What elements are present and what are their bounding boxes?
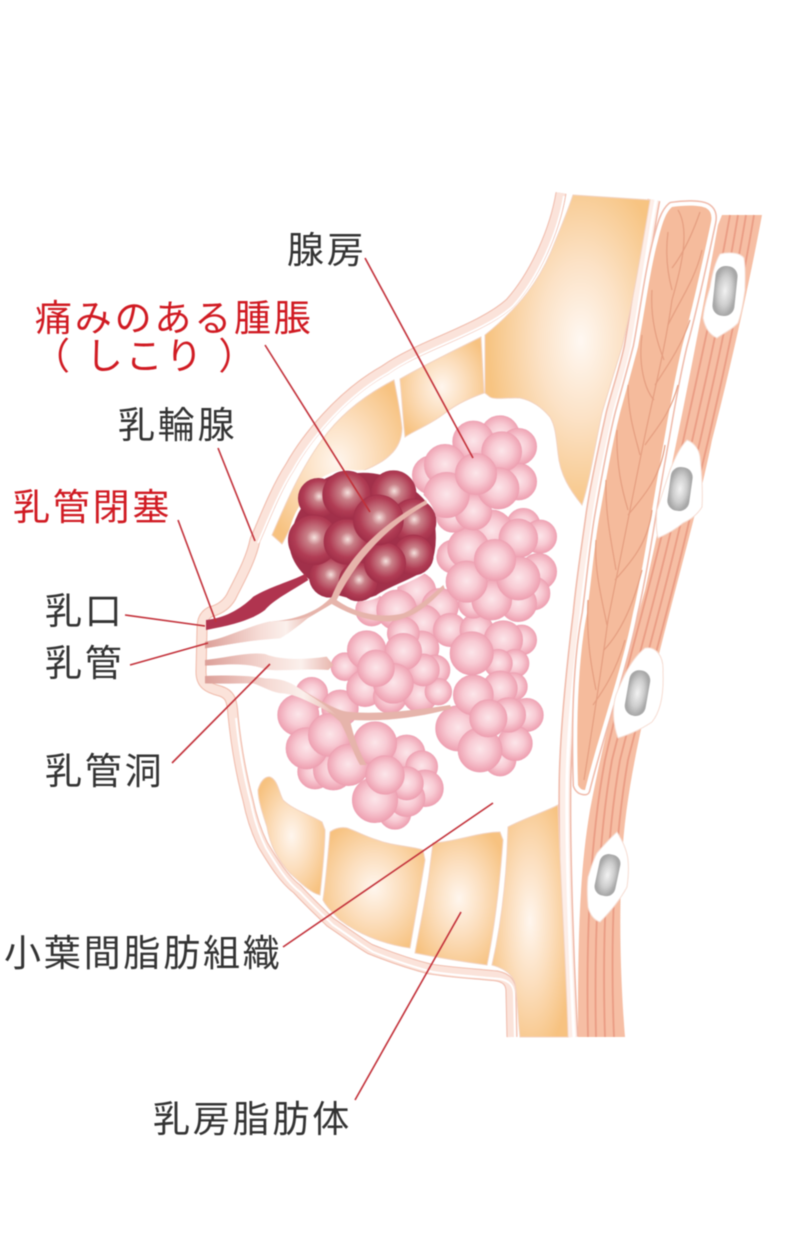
label: 乳輪腺: 乳輪腺 <box>118 405 237 446</box>
fat: lower lobe 1 <box>258 777 325 895</box>
pectoral muscle <box>577 206 711 790</box>
label: 小葉間脂肪組織: 小葉間脂肪組織 <box>4 933 283 974</box>
skin outline <box>201 193 564 1040</box>
glandular lobules and ducts <box>205 416 557 829</box>
painful lump <box>288 471 437 601</box>
label: 痛みのある腫脹（しこり）: 痛みのある腫脹 <box>35 298 314 339</box>
milk duct upper <box>205 500 445 648</box>
rib 3 <box>614 648 663 738</box>
fat: lower lobe 3 <box>415 832 503 965</box>
label: 腺房: 腺房 <box>287 230 367 271</box>
milk duct lower <box>205 676 452 765</box>
label: 乳管洞: 乳管洞 <box>45 751 164 792</box>
fat: upper large lobe <box>485 195 650 505</box>
inner chest band <box>565 200 656 1037</box>
fat: lower lobe 4 <box>492 805 568 1037</box>
rib 1 <box>703 253 745 338</box>
lobule cluster: lower right <box>436 671 543 776</box>
label: 乳管: 乳管 <box>45 643 125 684</box>
muscle fibres <box>584 210 702 780</box>
lobule cluster: centre <box>331 617 452 713</box>
lobule cluster: lower left <box>278 677 443 829</box>
outer chest muscle with stripes <box>578 215 762 1037</box>
leader lines <box>125 258 493 1100</box>
label: 乳管閉塞: 乳管閉塞 <box>13 487 172 528</box>
lobule cluster: centre back <box>356 572 537 677</box>
label: 乳口: 乳口 <box>45 591 125 632</box>
blocked duct <box>206 574 308 630</box>
lobule cluster: right middle <box>437 508 557 622</box>
rib 4 <box>587 832 628 922</box>
rib 2 <box>656 440 702 538</box>
label: 痛みのある腫脹（しこり）: （ しこり ） <box>33 336 258 377</box>
label: 乳房脂肪体: 乳房脂肪体 <box>153 1099 352 1140</box>
fat: upper middle lobe <box>400 337 484 437</box>
lobule cluster: top right <box>412 416 537 532</box>
label: 痛みのある腫脹（しこり） <box>33 298 314 377</box>
fat: upper left lobe <box>272 380 402 544</box>
fat: lower lobe 2 <box>323 828 425 948</box>
milk duct middle <box>205 654 333 670</box>
